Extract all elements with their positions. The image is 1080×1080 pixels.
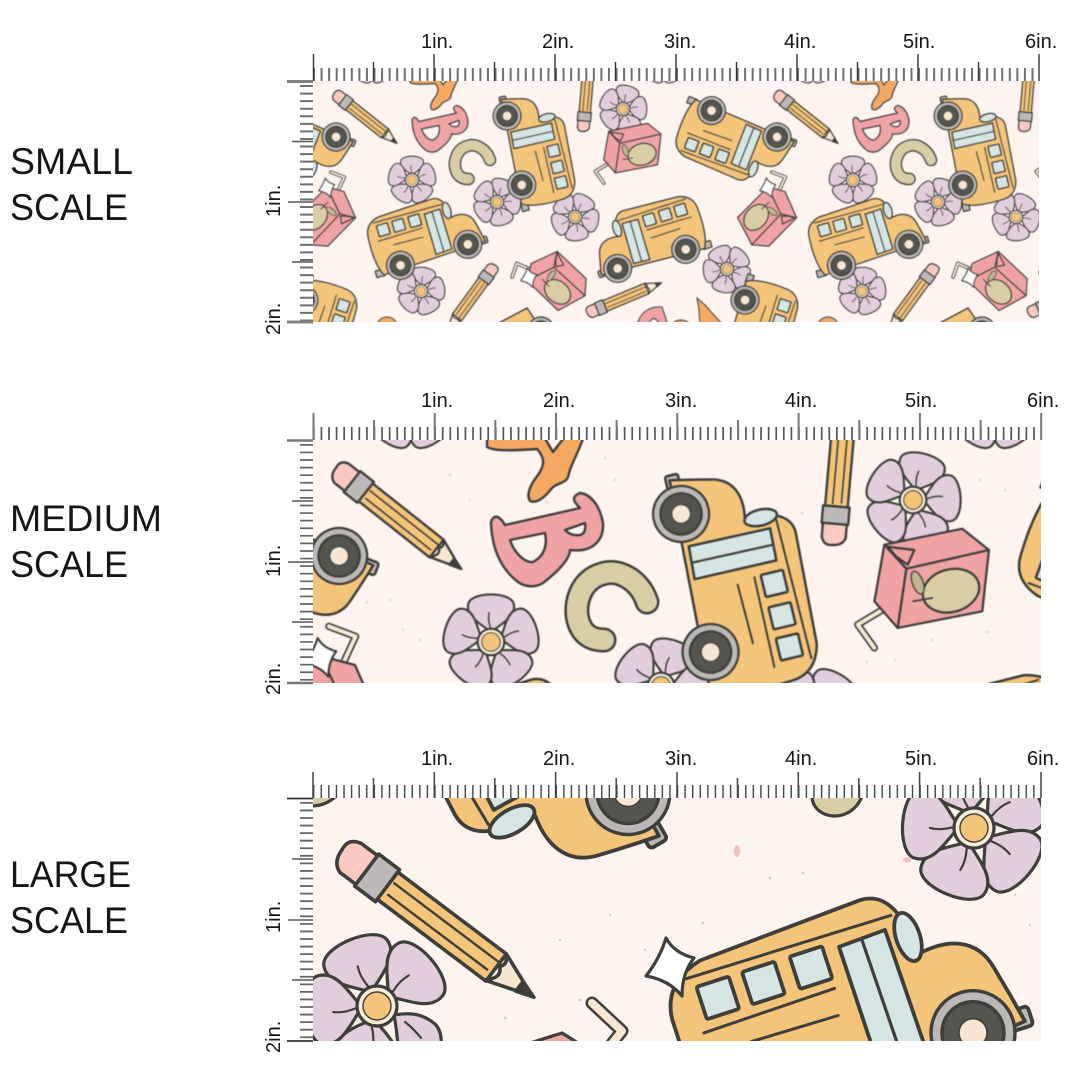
- top ticks: [313, 772, 1041, 798]
- body lines: [686, 915, 891, 1042]
- left ticks: [287, 440, 313, 683]
- letter B: [412, 106, 468, 152]
- inch labels: 6in.: [1027, 390, 1059, 412]
- inch labels: 1in.: [421, 31, 453, 53]
- flower: [303, 927, 454, 1061]
- speckles: [389, 457, 1006, 661]
- pattern repeat left: [0, 36, 371, 343]
- juice box: [507, 236, 594, 324]
- star: [646, 938, 694, 996]
- heading: large scale: LARGE: [10, 854, 131, 895]
- inch labels: 1in.: [263, 185, 285, 217]
- inch labels: 1in.: [421, 390, 453, 412]
- school bus bottom edge: [730, 272, 800, 322]
- panel: small scale fabric swatch: [313, 81, 1039, 322]
- letter C: [455, 145, 490, 179]
- windows: [696, 946, 832, 1019]
- inch labels: 2in.: [543, 748, 575, 770]
- heading: medium scale: [10, 498, 162, 585]
- pencil: [584, 276, 664, 320]
- heading: medium scale: SCALE: [10, 544, 128, 585]
- inch labels: 2in.: [263, 663, 285, 695]
- door: [839, 930, 926, 1066]
- inch labels: 5in.: [905, 390, 937, 412]
- school bus: [668, 88, 801, 194]
- inch labels: 6in.: [1027, 748, 1059, 770]
- heading: small scale: SCALE: [10, 187, 128, 228]
- school bus: [583, 189, 715, 289]
- school bus: [671, 898, 1034, 1075]
- inch labels: 4in.: [784, 31, 816, 53]
- inch labels: 3in.: [665, 390, 697, 412]
- star: [521, 268, 537, 287]
- top ticks: [313, 413, 1041, 440]
- school bus partial: [497, 308, 554, 343]
- flower: [880, 740, 1069, 923]
- flower: [386, 156, 438, 206]
- inch labels: 3in.: [665, 748, 697, 770]
- enlarged pattern wrap: [313, 443, 966, 683]
- school bus upside down: [344, 518, 699, 925]
- flower: [638, 36, 690, 86]
- inch labels: 2in.: [542, 31, 574, 53]
- pencil: [576, 51, 597, 132]
- top ticks: [313, 54, 1039, 81]
- juice box straw: [592, 1003, 622, 1046]
- flower: [702, 244, 752, 294]
- front wheel: [931, 991, 1015, 1075]
- inch labels: 1in.: [263, 545, 285, 577]
- bumper: [1004, 1006, 1034, 1032]
- inch labels: 5in.: [905, 748, 937, 770]
- repeating pattern tile: [330, 36, 812, 343]
- khaki letter fragments: [311, 796, 862, 816]
- inch labels: [263, 31, 1057, 335]
- school bus: [360, 187, 491, 286]
- inch labels: 1in.: [421, 748, 453, 770]
- inch labels: 2in.: [263, 1021, 285, 1053]
- inch labels: [263, 390, 1059, 695]
- panel: large scale fabric swatch: [313, 798, 1041, 1041]
- flower: [346, 36, 398, 86]
- flower: [391, 263, 451, 321]
- pencil: [329, 835, 546, 1012]
- inch labels: 5in.: [903, 31, 935, 53]
- flower: [539, 183, 610, 253]
- left ticks: [287, 798, 313, 1041]
- enlarged pattern: [330, 440, 1041, 683]
- heading: small scale: SMALL: [10, 141, 133, 182]
- letter A: [410, 74, 460, 110]
- yellow bus fragment: [311, 1026, 322, 1043]
- inch labels: 3in.: [664, 31, 696, 53]
- pencil: [330, 88, 401, 148]
- speckles: [504, 845, 1031, 1020]
- juice box: [595, 123, 661, 183]
- pencil: [442, 261, 500, 334]
- inch labels: 1in.: [263, 901, 285, 933]
- heading: large scale: SCALE: [10, 900, 128, 941]
- letter fragments: [377, 298, 722, 335]
- inch labels: 2in.: [543, 390, 575, 412]
- ruler: medium scale: [263, 390, 1059, 695]
- left ticks: [287, 82, 313, 322]
- inch labels: 2in.: [263, 303, 285, 335]
- pattern repeat right: [772, 81, 1039, 322]
- speckles: [349, 109, 701, 271]
- inch labels: 4in.: [785, 390, 817, 412]
- heading: medium scale: MEDIUM: [10, 498, 162, 539]
- ruler: small scale: [263, 31, 1057, 335]
- school bus: [487, 84, 582, 214]
- inch labels: [263, 748, 1059, 1053]
- inch labels: 6in.: [1025, 31, 1057, 53]
- school bus bottom left edge: [313, 274, 358, 322]
- flower: [591, 79, 654, 141]
- inch labels: 4in.: [785, 748, 817, 770]
- windshield: [889, 910, 927, 964]
- heading: large scale: [10, 854, 131, 941]
- star: [760, 178, 776, 197]
- panel: medium scale fabric swatch: [313, 440, 1041, 683]
- juice box fragment: [530, 1033, 578, 1043]
- heading: small scale: [10, 141, 133, 228]
- bus body: [671, 898, 1025, 1055]
- ruler: large scale: [263, 748, 1059, 1053]
- juice box: [724, 168, 812, 254]
- flower: [463, 171, 530, 235]
